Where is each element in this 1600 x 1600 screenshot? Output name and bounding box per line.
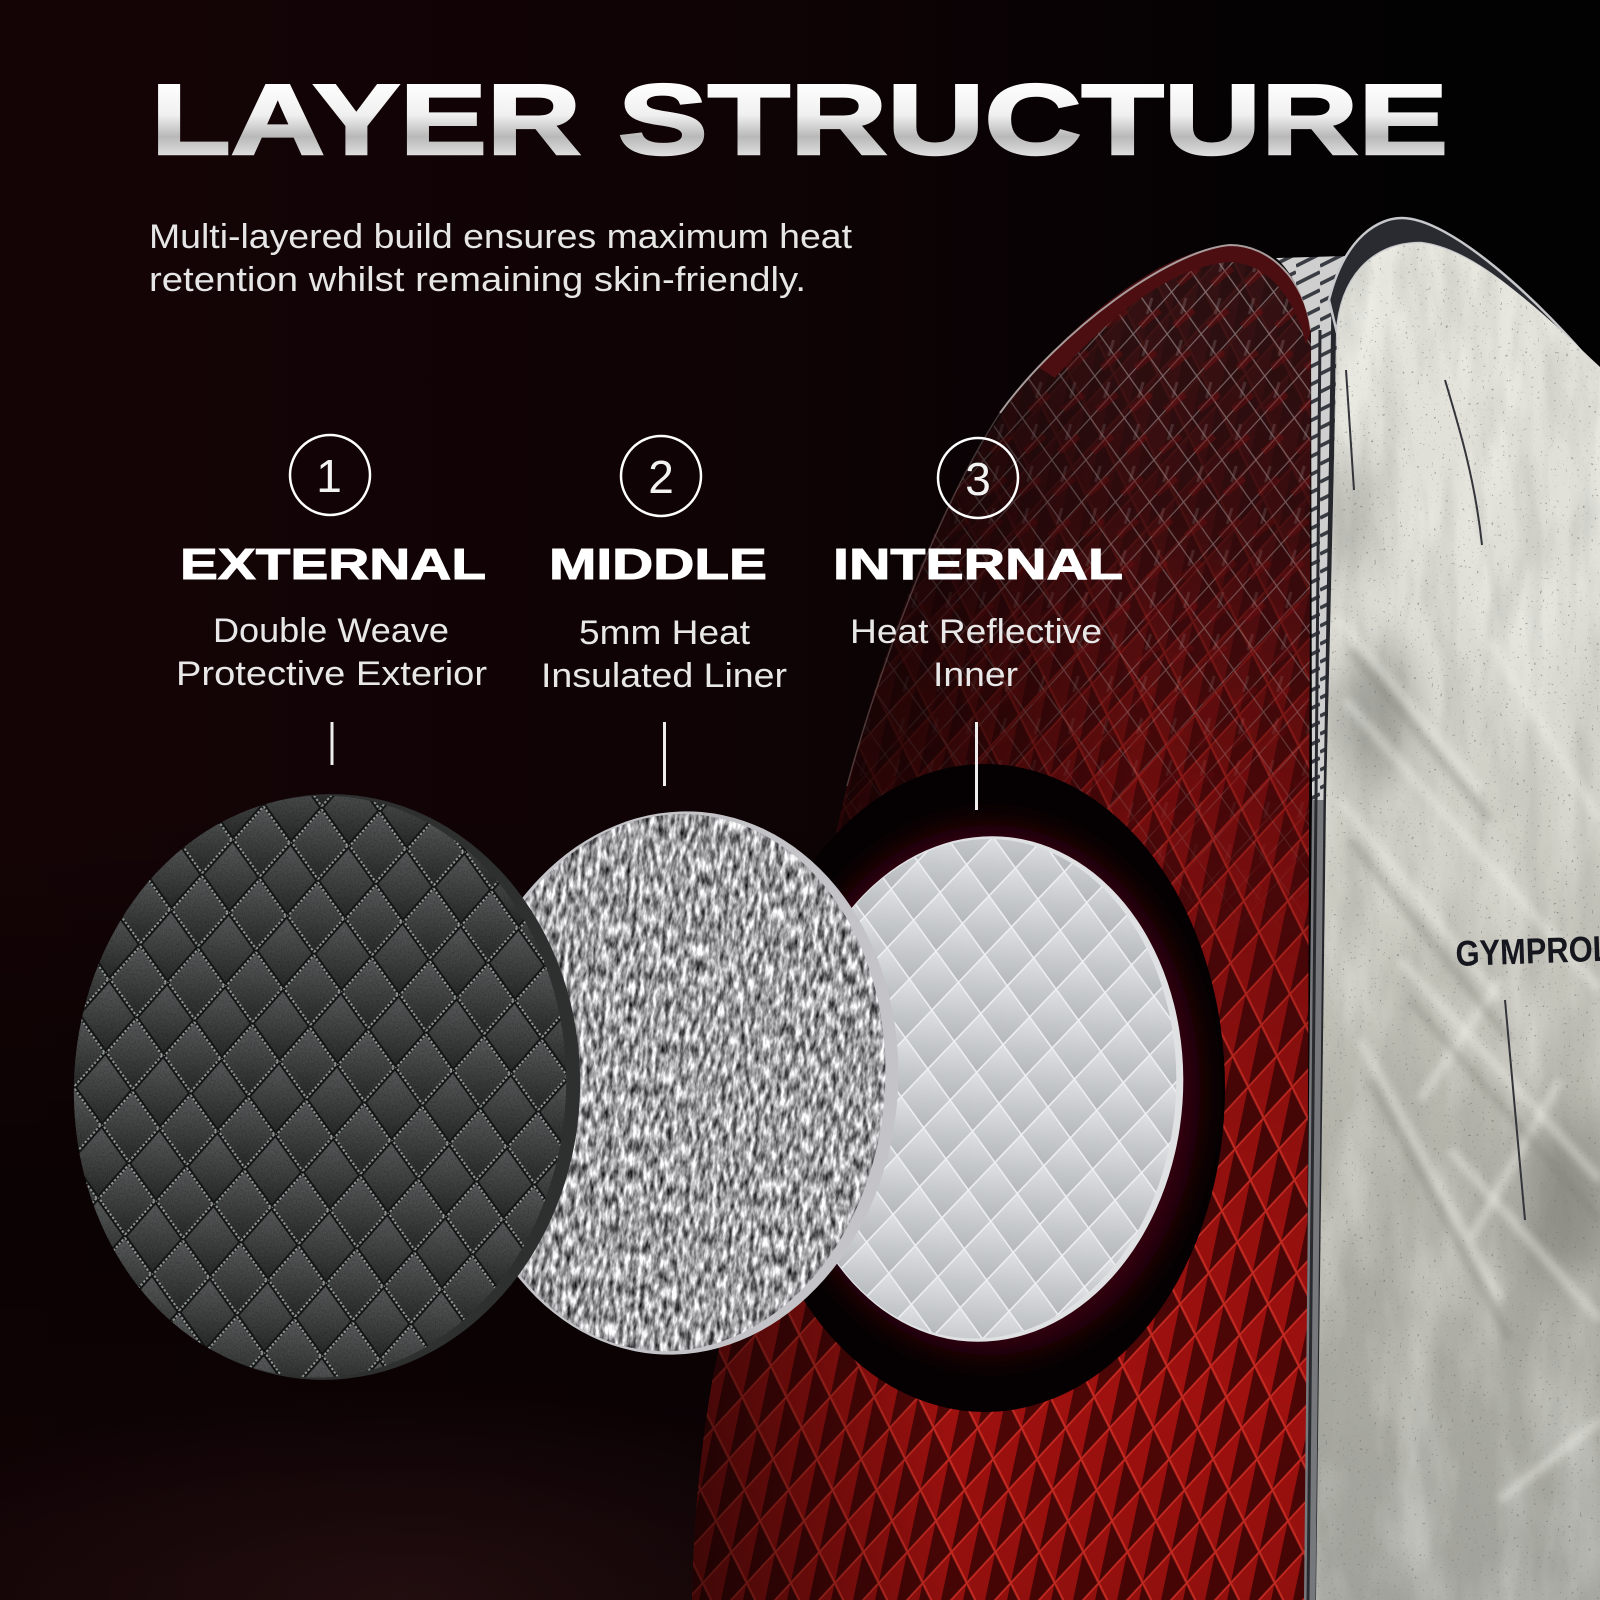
red quilted tent interior panel bbox=[680, 230, 1320, 1600]
description external bbox=[176, 612, 487, 693]
description middle: Insulated Liner bbox=[541, 657, 787, 695]
layer 3 label group bbox=[833, 438, 1123, 810]
description internal: Heat Reflective bbox=[850, 613, 1102, 651]
leader line 2 bbox=[663, 722, 666, 786]
dark halo behind internal disk bbox=[745, 764, 1225, 1412]
disk: middle layer foil bbox=[518, 811, 898, 1355]
silver tent exterior panel bbox=[1310, 218, 1600, 1600]
disk: external layer quilted bbox=[74, 794, 580, 1380]
description middle bbox=[541, 614, 787, 695]
leader line 3 bbox=[975, 722, 978, 810]
number badge 3: 3 bbox=[965, 453, 991, 505]
intro text: retention whilst remaining skin-friendly. bbox=[149, 261, 806, 299]
zipper strip between tent panels bbox=[1276, 256, 1345, 1600]
layer 2 label group bbox=[541, 436, 787, 786]
description internal: Inner bbox=[933, 656, 1018, 694]
heading middle: MIDDLE bbox=[549, 540, 767, 589]
disk: internal layer bbox=[770, 823, 1200, 1355]
leader line 1 bbox=[330, 722, 334, 765]
title: LAYER bbox=[151, 64, 581, 176]
number badge 2 bbox=[621, 436, 701, 516]
intro text bbox=[149, 218, 853, 299]
description external: Double Weave bbox=[213, 612, 449, 650]
number badge 3 bbox=[938, 438, 1018, 518]
heading external: EXTERNAL bbox=[180, 540, 486, 589]
description internal bbox=[850, 613, 1102, 694]
title bbox=[151, 64, 1448, 176]
layer 1 label group bbox=[176, 435, 487, 765]
title: STRUCTURE bbox=[618, 64, 1448, 176]
description middle: 5mm Heat bbox=[579, 614, 751, 652]
number badge 1: 1 bbox=[316, 450, 342, 502]
intro text: Multi-layered build ensures maximum heat bbox=[149, 218, 853, 256]
heading internal: INTERNAL bbox=[833, 540, 1123, 589]
number badge 1 bbox=[290, 435, 370, 515]
number badge 2: 2 bbox=[648, 451, 674, 503]
description external: Protective Exterior bbox=[176, 655, 487, 693]
